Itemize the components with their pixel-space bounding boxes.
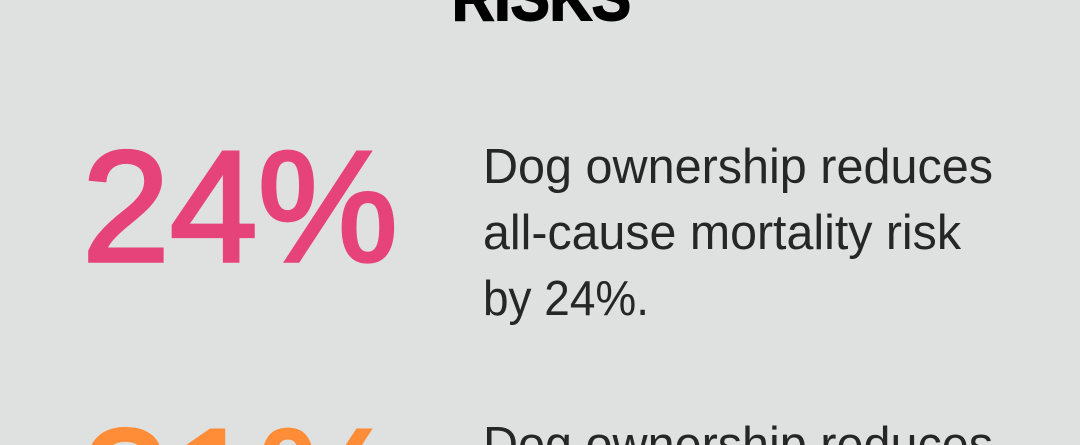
description: all-cause mortality: by 24%.	[483, 272, 649, 326]
stat number: 24%: 24%	[82, 119, 398, 295]
description: all-cause mortality: all-cause mortality risk	[483, 206, 961, 260]
stat row: 24 percent	[82, 119, 1007, 326]
stat row: 31 percent	[82, 397, 993, 445]
description: all-cause mortality: Dog ownership reduces	[483, 140, 993, 194]
